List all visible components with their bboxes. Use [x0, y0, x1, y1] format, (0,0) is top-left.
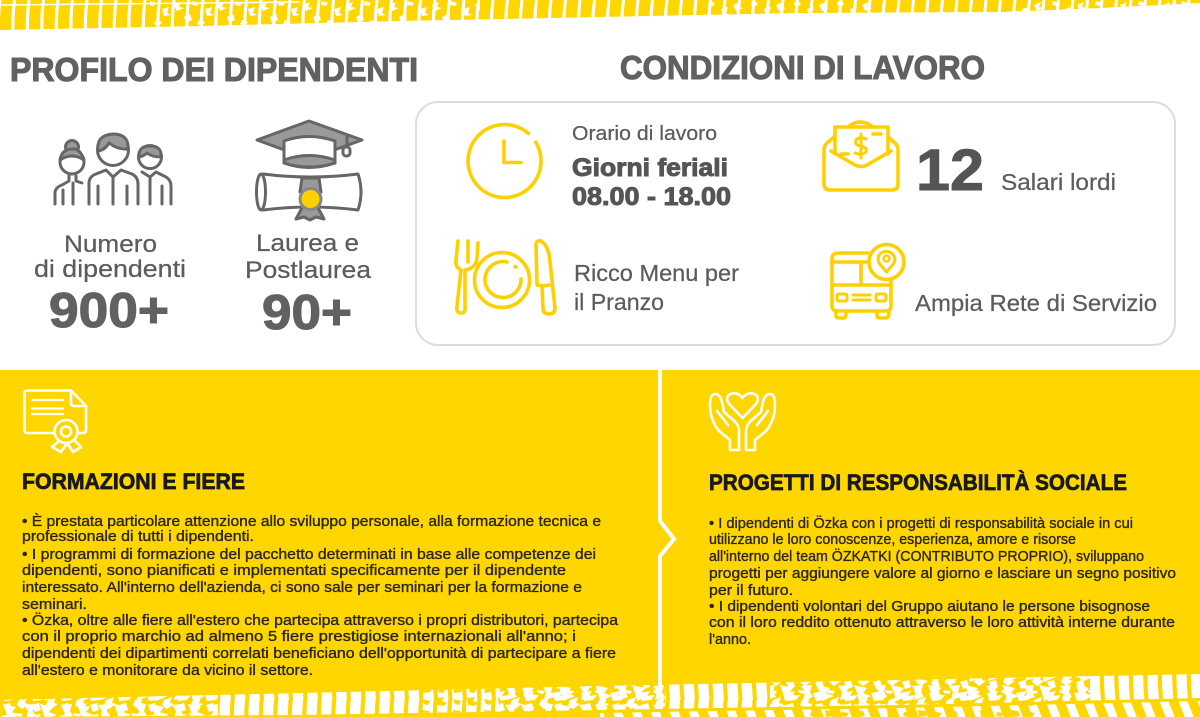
text: formazioni body: • È prestata particolare attenzione allo sviluppo personale, alla formazione tecnica e: [22, 513, 601, 530]
text: progetti body: con il loro reddito ottenuto attraverso le loro attività interne durante: [709, 615, 1175, 631]
text: formazioni body: interessato. All'interno dell'azienda, ci sono sale per seminari per la formazione e: [22, 580, 582, 596]
text: progetti body: • I dipendenti volontari del Gruppo aiutano le persone bisognose: [709, 599, 1150, 615]
icon: graduation cap and diploma: [256, 121, 362, 220]
text: formazioni body: professionale di tutti i dipendenti.: [22, 529, 254, 545]
icon: hands holding heart: [710, 393, 775, 450]
text: progetti body: per il futuro.: [709, 583, 793, 599]
tyre track: top band: [0, 0, 1200, 30]
icon: bus with location pin: [832, 244, 904, 318]
panel: working conditions: [416, 102, 1175, 345]
text: ricco menu per il pranzo: Ricco Menu per: [574, 260, 739, 286]
text: formazioni body: • I programmi di formazione del pacchetto determinati in base alle competenze dei: [22, 547, 596, 563]
text: formazioni body: con il proprio marchio ad almeno 5 fiere prestigiose internazionali all'anno; i: [22, 629, 576, 645]
panel: progetti di responsabilita sociale: [709, 393, 1176, 648]
heading: progetti di responsabilita sociale: PROGETTI DI RESPONSABILITÀ SOCIALE: [709, 470, 1127, 495]
stat: 900+: 900+: [49, 284, 169, 338]
text: progetti body: all'interno del team ÖZKATKI (CONTRIBUTO PROPRIO), sviluppano: [709, 547, 1144, 565]
text: progetti body: • I dipendenti di Özka con i progetti di responsabilità sociale in cui: [709, 514, 1133, 532]
text: working hours: Giorni feriali: [572, 154, 728, 182]
label: numero di dipendenti: Numero: [64, 231, 157, 258]
icon: clock: [468, 125, 541, 198]
text: formazioni body: [22, 513, 619, 679]
text: ricco menu per il pranzo: [574, 260, 739, 315]
stat: 12: 12: [916, 138, 984, 203]
text: progetti body: progetti per aggiungere valore al giorno e lasciare un segno positivo: [709, 566, 1176, 582]
label: laurea e postlaurea: [245, 230, 372, 284]
text: salari lordi: Salari lordi: [1001, 169, 1116, 195]
tyre track: bottom band: [0, 670, 1200, 717]
text: progetti body: [709, 514, 1176, 648]
label: laurea e postlaurea: Postlaurea: [245, 257, 372, 284]
text: working hours: [572, 122, 731, 211]
icon: certificate: [24, 390, 86, 452]
title: condizioni di lavoro: CONDIZIONI DI LAVORO: [620, 49, 985, 86]
text: ampia rete di servizio: Ampia Rete di Servizio: [915, 290, 1157, 316]
icon: fork, plate and knife: [456, 241, 555, 314]
text: formazioni body: • Özka, oltre alle fiere all'estero che partecipa attraverso i propri distributori, partecipa: [22, 611, 619, 629]
text: progetti body: utilizzano le loro conoscenze, esperienza, amore e risorse: [709, 532, 1076, 548]
text: progetti body: l'anno.: [709, 632, 751, 648]
label: numero di dipendenti: [34, 231, 186, 283]
label: laurea e postlaurea: Laurea e: [256, 230, 359, 257]
text: formazioni body: seminari.: [22, 597, 87, 613]
stat: 90+: 90+: [262, 286, 352, 340]
icon: employees: [55, 134, 171, 204]
divider with chevron: [660, 370, 674, 685]
heading: formazioni e fiere: FORMAZIONI E FIERE: [22, 469, 245, 494]
text: formazioni body: dipendenti dei dipartimenti correlati beneficiano dell'opportunità di partecipare a fiere: [22, 646, 616, 662]
text: formazioni body: dipendenti, sono pianificati e implementati specificamente per il dipendente: [22, 563, 566, 579]
text: working hours: 08.00 - 18.00: [572, 183, 731, 211]
text: ricco menu per il pranzo: il Pranzo: [574, 289, 664, 315]
icon: envelope with salary: [824, 122, 898, 190]
title: profilo dei dipendenti: PROFILO DEI DIPENDENTI: [10, 51, 418, 88]
panel: formazioni e fiere: [22, 390, 619, 679]
text: formazioni body: all'estero e monitorare da vicino il settore.: [22, 663, 313, 679]
panel: yellow background: [0, 370, 1200, 717]
label: numero di dipendenti: di dipendenti: [34, 256, 186, 283]
text: working hours: Orario di lavoro: [572, 122, 717, 145]
